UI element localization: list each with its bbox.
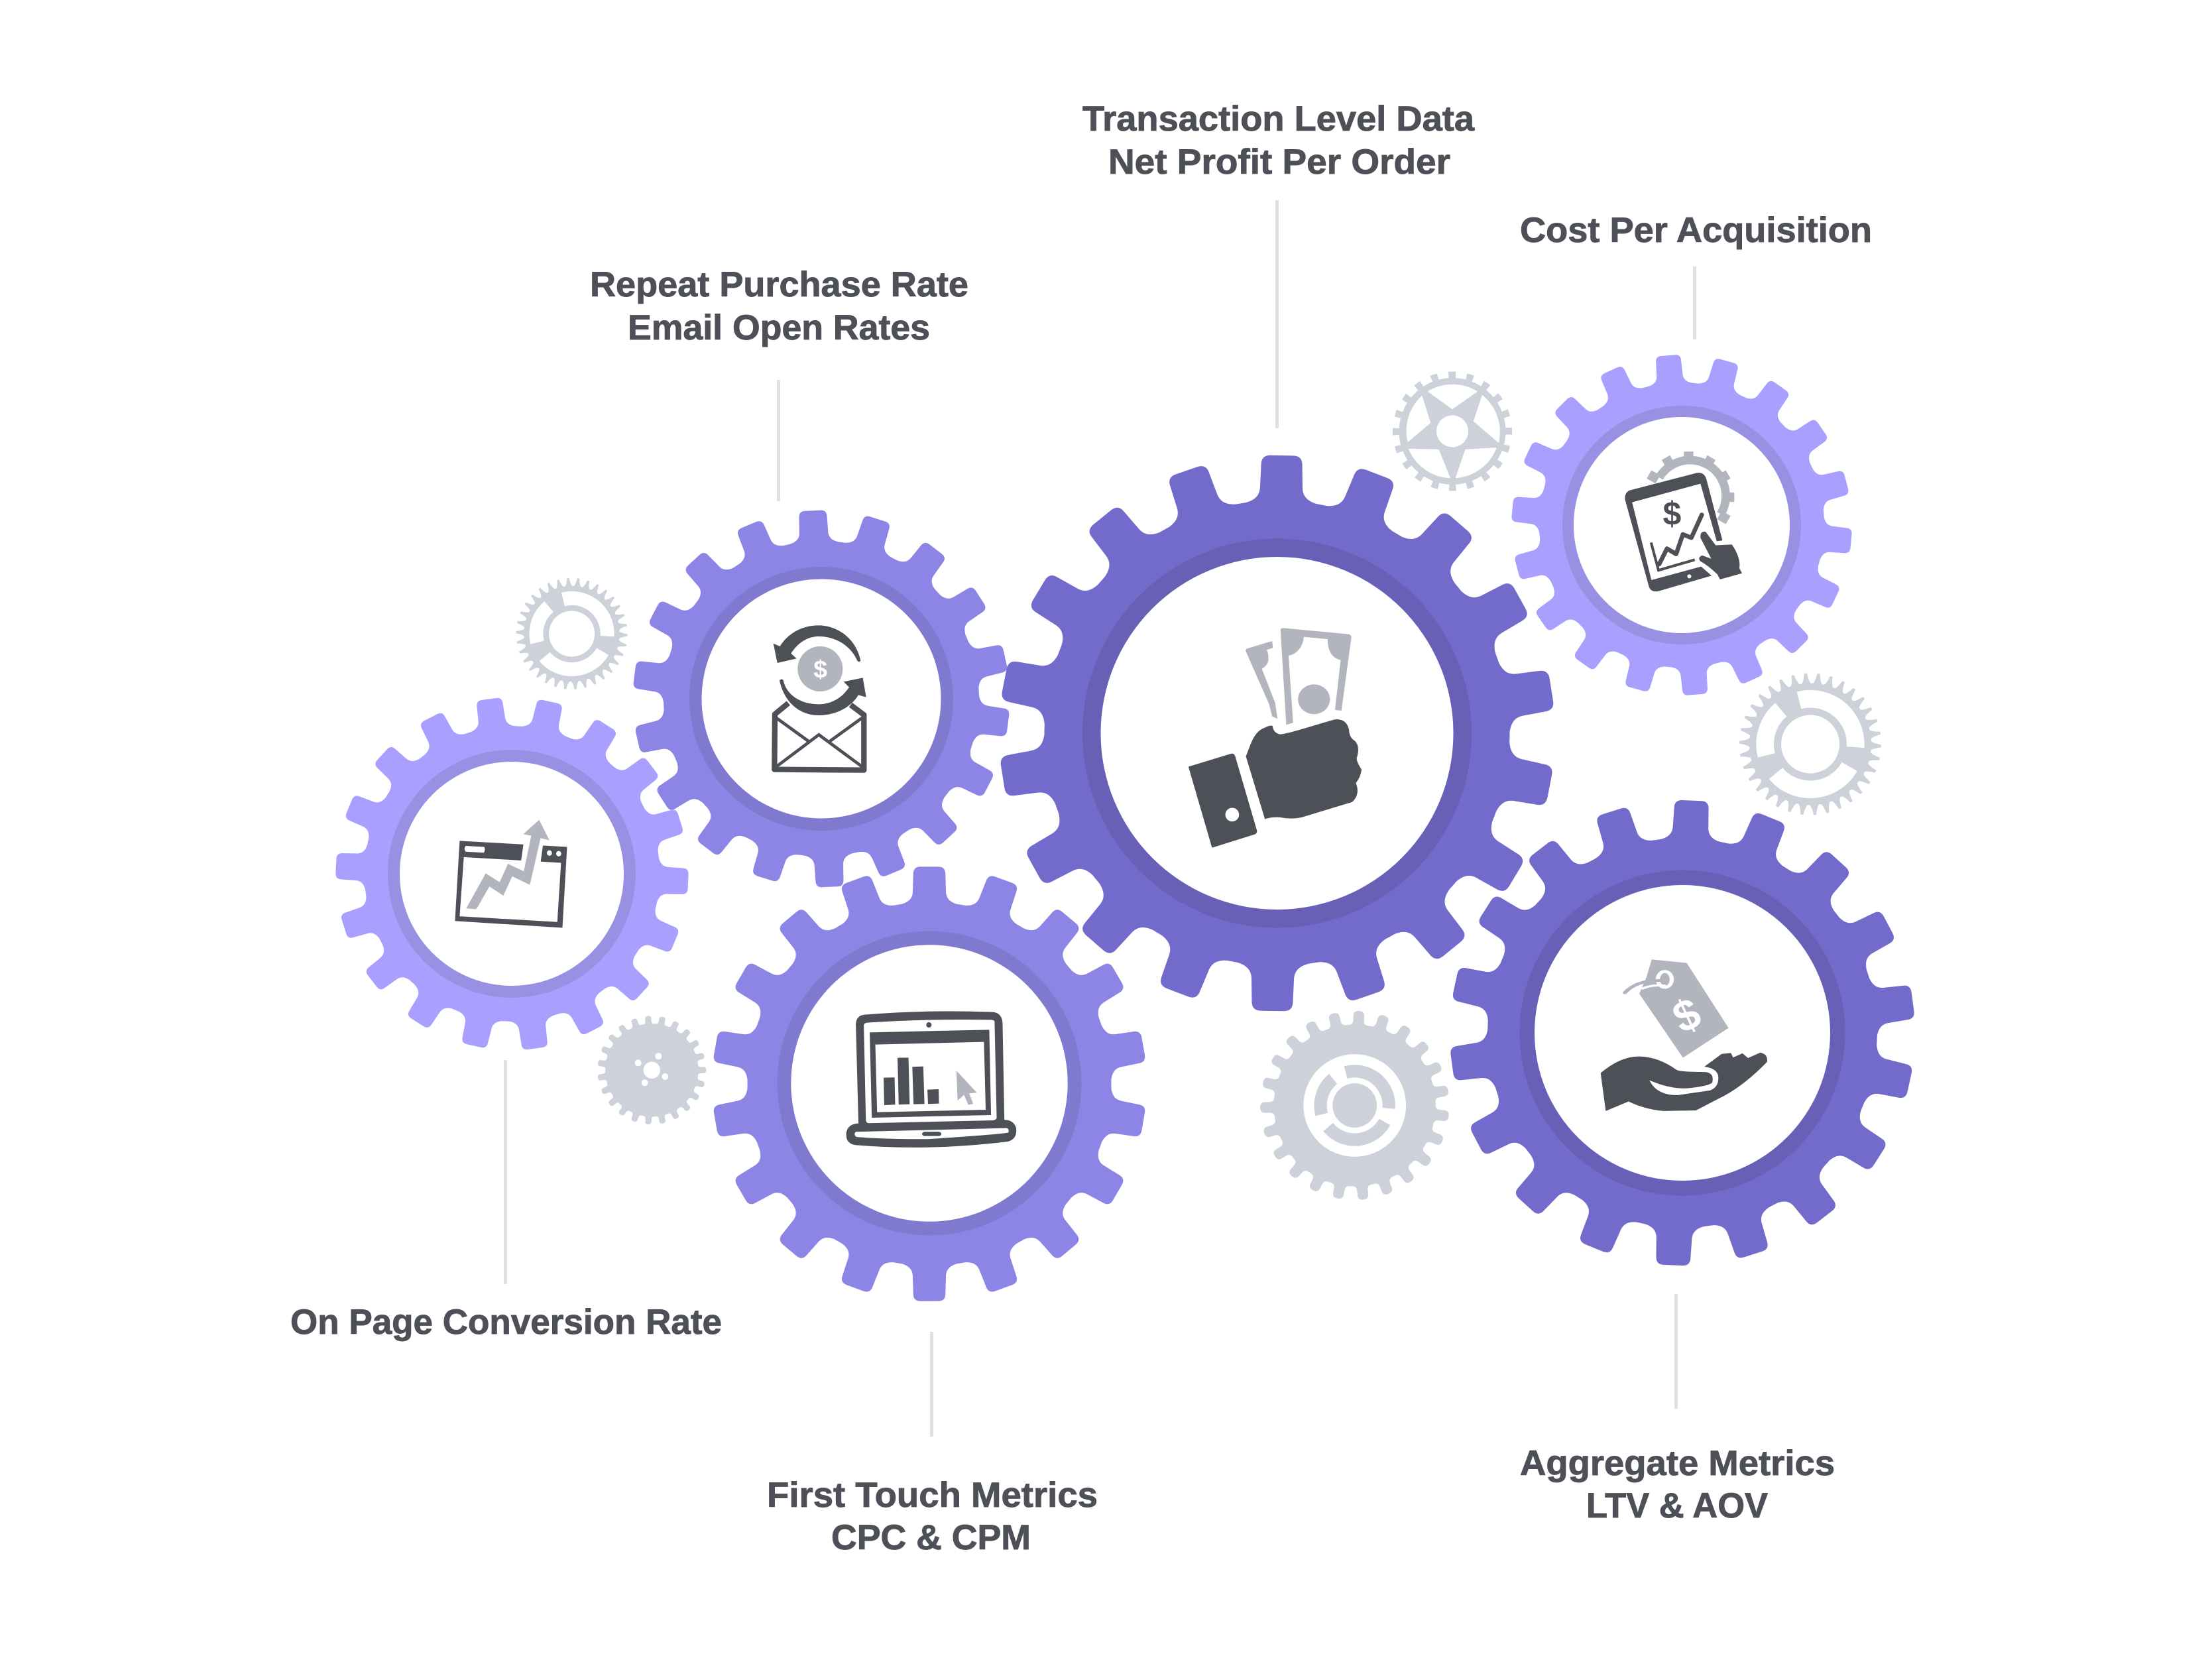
label: repeat purchase rate: Repeat Purchase Rate [590, 265, 968, 304]
gear: repeat purchase [623, 502, 1019, 896]
small gear: ring cog upper left [508, 570, 635, 697]
label: first touch metrics [767, 1476, 1098, 1557]
small gear: large grey cog [1255, 1006, 1454, 1205]
gear: on page conversion [313, 676, 711, 1072]
gear: transaction level [992, 451, 1562, 1016]
icon: hand with price tag [1601, 959, 1767, 1111]
small gear: ring cog right [1729, 663, 1891, 825]
label: cost per acquisition: Cost Per Acquisition [1520, 211, 1872, 250]
icon: hand holding money [1189, 628, 1362, 848]
label: first touch metrics: First Touch Metrics [767, 1476, 1098, 1515]
icon: laptop with bar chart [846, 1011, 1016, 1148]
label: repeat purchase rate: Email Open Rates [628, 308, 930, 347]
label: aggregate metrics [1520, 1444, 1835, 1525]
icon: email with dollar cycle [774, 625, 866, 770]
label: repeat purchase rate [590, 265, 968, 347]
connector: repeat purchase [777, 380, 780, 501]
label: transaction level data: Net Profit Per Order [1108, 143, 1450, 182]
connector: aggregate metrics [1674, 1294, 1678, 1409]
small gear: dotted cog lower left [593, 1012, 710, 1128]
icon: email with dollar cycle: $ [813, 655, 827, 683]
gear: aggregate metrics [1438, 791, 1926, 1275]
connector: cost per acquisition [1693, 266, 1696, 339]
gear: cost per acquisition [1497, 341, 1867, 709]
connector: transaction level [1275, 200, 1279, 428]
label: first touch metrics: CPC & CPM [831, 1518, 1031, 1557]
icon: tablet with chart and gear: $ [1663, 495, 1682, 532]
label: on page conversion rate: On Page Conversion Rate [290, 1303, 722, 1342]
label: transaction level data: Transaction Level Data [1082, 99, 1475, 139]
icon: browser window with rising arrow [455, 820, 567, 927]
connector: first touch [930, 1332, 933, 1437]
gear: first touch [710, 866, 1149, 1301]
icon: hand with price tag: $ [1665, 988, 1708, 1042]
label: aggregate metrics: LTV & AOV [1586, 1486, 1768, 1525]
connector: on page conversion [504, 1060, 507, 1284]
label: transaction level data [1082, 99, 1475, 182]
small gear: star cog top [1393, 371, 1512, 491]
icon: tablet with chart and gear [1625, 451, 1742, 591]
label: aggregate metrics: Aggregate Metrics [1520, 1444, 1835, 1483]
